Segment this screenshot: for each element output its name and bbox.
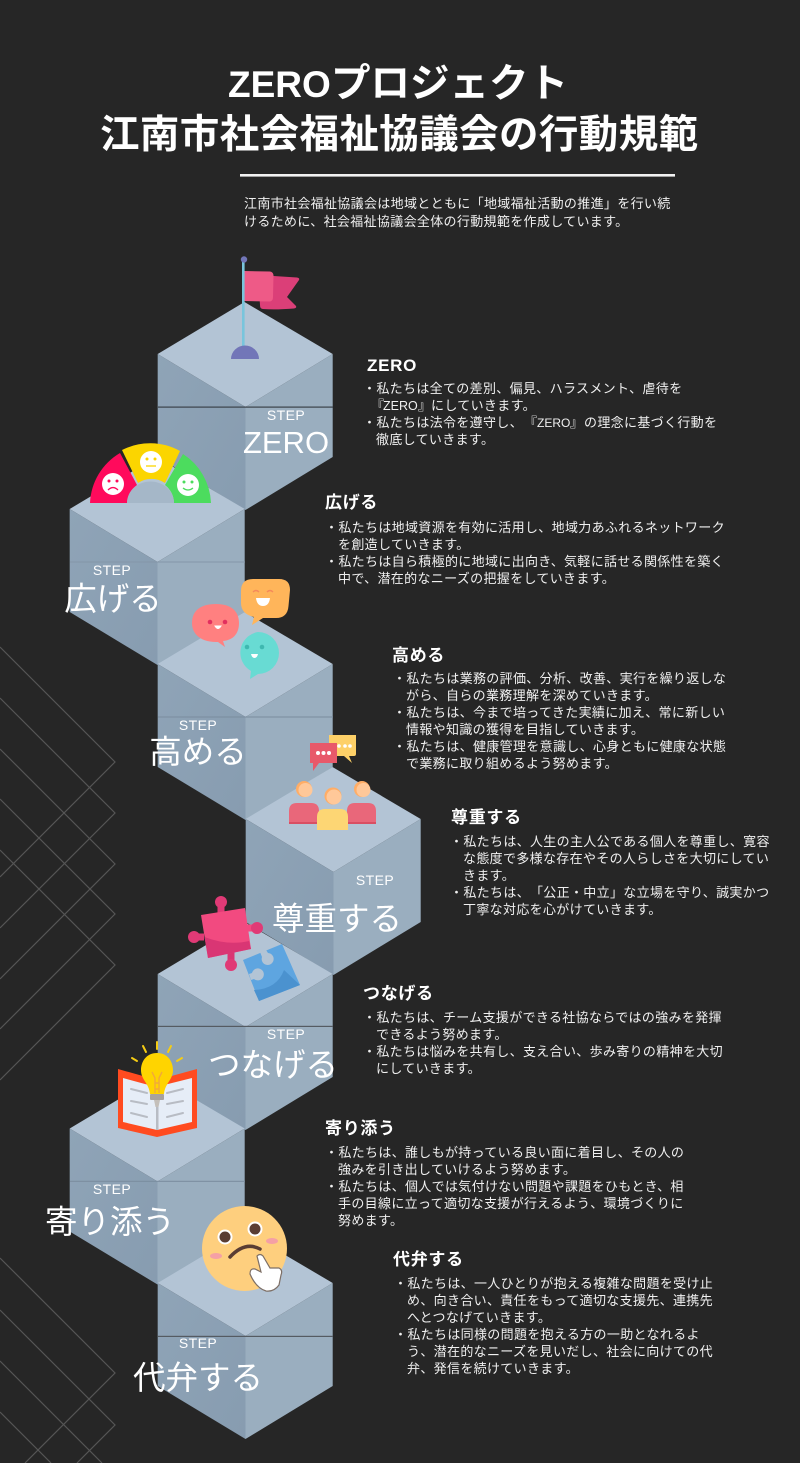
step: 高める [149, 579, 333, 820]
text block: つなげる: ・私たちは悩みを共有し、支え合い、歩み寄りの精神を大切 [363, 1044, 723, 1059]
text block: つなげる [363, 984, 723, 1076]
cube [70, 1076, 245, 1284]
text block: ZERO: ZERO [383, 399, 418, 413]
divider line [158, 716, 333, 718]
text block: ZERO: 『 [524, 415, 537, 430]
text block: 代弁する: め、向き合い、責任をもって適切な支援先、連携先 [407, 1293, 713, 1308]
icon: people meeting [289, 735, 376, 830]
text block: 高める: 高める [392, 645, 445, 665]
text block: ZERO: ・私たちは法令を遵守し、 [363, 415, 523, 430]
step label: STEP [267, 407, 305, 423]
text block: 代弁する [393, 1249, 713, 1376]
intro text: 江南市社会福祉協議会は地域とともに「地域福祉活動の推進」を行い続 [244, 196, 671, 211]
text block: ZERO: 徹底していきます。 [376, 432, 494, 447]
text block: ZERO: ・私たちは全ての差別、偏見、ハラスメント、虐待を [363, 381, 682, 396]
step label: STEP [179, 1335, 217, 1351]
title underline [240, 174, 675, 177]
cube [70, 457, 245, 665]
icon: puzzle pieces [188, 896, 300, 1001]
step label: STEP [179, 717, 217, 733]
step name: 尊重する [272, 901, 402, 937]
text block: 高める: で業務に取り組めるよう努めます。 [406, 756, 618, 771]
step name: 代弁する [133, 1360, 263, 1396]
text block: 代弁する: 代弁する [393, 1249, 464, 1269]
divider line [70, 562, 245, 563]
text block: つなげる: ・私たちは、チーム支援ができる社協ならではの強みを発揮 [363, 1010, 722, 1025]
step: 尊重する [246, 735, 421, 975]
text block: 寄り添う: ・私たちは、個人では気付けない問題や課題をひもとき、相 [325, 1179, 684, 1194]
text block: 代弁する: 弁、発信を続けていきます。 [407, 1361, 579, 1376]
text block: つなげる: にしていきます。 [376, 1061, 481, 1076]
cube [158, 612, 333, 820]
text block: ZERO: の理念に基づく行動を [584, 415, 717, 430]
text block: 尊重する: ・私たちは、人生の主人公である個人を尊重し、寛容 [450, 834, 770, 849]
step label: STEP [356, 872, 394, 888]
text block: ZERO: 』 [570, 415, 583, 430]
icon: flag [231, 256, 299, 359]
text block: 代弁する: う、潜在的なニーズを見いだし、社会に向けての代 [407, 1344, 713, 1359]
divider line [70, 1181, 245, 1182]
step: 広げる [64, 443, 245, 665]
text block: 寄り添う [325, 1119, 684, 1228]
step: つなげる [158, 896, 338, 1130]
text block: 寄り添う: 寄り添う [325, 1119, 396, 1138]
text block: ZERO: ZERO [367, 356, 417, 375]
text block: つなげる: つなげる [363, 984, 434, 1003]
background diagonal pattern [0, 647, 115, 1463]
text block: 広げる: ・私たちは自ら積極的に地域に出向き、気軽に話せる関係性を築く [325, 554, 724, 569]
divider line [158, 406, 333, 408]
text block: 寄り添う: 努めます。 [338, 1213, 403, 1228]
step: 代弁する [133, 1206, 333, 1439]
divider line [158, 1336, 333, 1337]
text block: ZERO: 』 [418, 398, 431, 413]
step name: 広げる [64, 581, 162, 617]
icon: chat bubbles [192, 579, 290, 679]
text block: つなげる: できるよう努めます。 [376, 1027, 508, 1042]
divider line [158, 1026, 333, 1027]
text block: 高める: ・私たちは、今まで培ってきた実績に加え、常に新しい [393, 705, 725, 720]
icon: mood gauge [90, 443, 211, 503]
text block: 尊重する: きます。 [463, 868, 515, 883]
text block: 高める: がら、自らの業務理解を深めていきます。 [406, 688, 658, 703]
cube [158, 302, 333, 510]
step name: ZERO [243, 425, 329, 460]
text block: 尊重する: 丁寧な対応を心がけていきます。 [463, 902, 662, 917]
cube [158, 1231, 333, 1439]
step name: 寄り添う [45, 1204, 175, 1240]
text block: 尊重する: な態度で多様な存在やその人らしさを大切にしてい [463, 851, 769, 866]
step label: STEP [93, 1181, 131, 1197]
text block: 代弁する: ・私たちは、一人ひとりが抱える複雑な問題を受け止 [394, 1276, 713, 1291]
icon: book and light bulb [118, 1042, 197, 1137]
text block: 代弁する: ・私たちは同様の問題を抱える方の一助となれるよ [394, 1327, 700, 1342]
step: 寄り添う [45, 1042, 245, 1284]
intro text: けるために、社会福祉協議会全体の行動規範を作成しています。 [244, 214, 628, 229]
cube [246, 767, 421, 975]
text block: 広げる [325, 493, 725, 586]
text block: 広げる: を創造していきます。 [338, 537, 470, 552]
title: プロジェクト [331, 62, 568, 106]
text block: 広げる: 広げる [325, 493, 378, 512]
text block: 尊重する: ・私たちは、「公正・中立」な立場を守り、誠実かつ [450, 885, 769, 900]
text block: 寄り添う: 手の目線に立って適切な支援が行えるよう、環境づくりに [338, 1196, 684, 1211]
text block: 代弁する: へとつなげていきます。 [407, 1310, 551, 1325]
text block: 広げる: 中で、潜在的なニーズの把握をしていきます。 [338, 571, 615, 586]
step name: 高める [149, 734, 247, 770]
text block: 広げる: ・私たちは地域資源を有効に活用し、地域力あふれるネットワーク [325, 520, 725, 535]
text block: 高める [392, 645, 726, 771]
step: ZERO [158, 256, 333, 510]
title: 江南市社会福祉協議会の行動規範 [100, 113, 698, 157]
text block: 寄り添う: ・私たちは、誰しもが持っている良い面に着目し、その人の [325, 1145, 684, 1160]
text block: ZERO: 『 [371, 398, 384, 413]
icon: thinking face [202, 1206, 287, 1291]
step name: つなげる [208, 1047, 338, 1083]
text block: 尊重する [450, 807, 770, 917]
step label: STEP [267, 1026, 305, 1042]
title [100, 62, 698, 157]
text block: ZERO: にしていきます。 [431, 398, 536, 413]
text block: 尊重する: 尊重する [451, 807, 522, 827]
text block: 高める: ・私たちは業務の評価、分析、改善、実行を繰り返しな [393, 671, 726, 686]
intro text [244, 196, 671, 229]
text block: ZERO: ZERO [537, 416, 570, 430]
text block: 高める: 情報や知識の獲得を目指していきます。 [406, 722, 644, 737]
cube [158, 922, 333, 1130]
text block: 高める: ・私たちは、健康管理を意識し、心身ともに健康な状態 [393, 739, 726, 754]
text block: ZERO [363, 356, 717, 447]
step label: STEP [93, 562, 131, 578]
text block: 寄り添う: 強みを引き出していけるよう努めます。 [338, 1162, 576, 1177]
title: ZERO [228, 64, 331, 105]
